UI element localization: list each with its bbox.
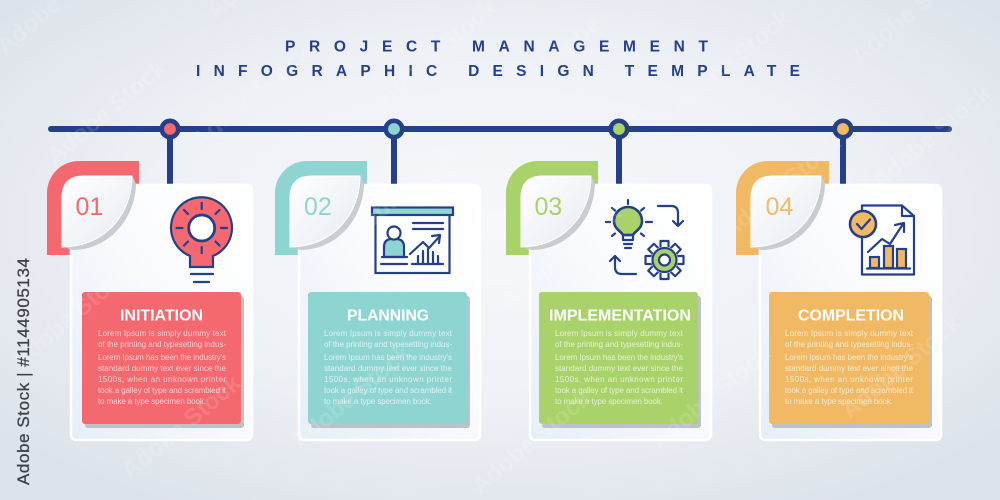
title	[196, 38, 800, 80]
text panel: Lorem Ipsum has been the industry's	[324, 353, 452, 362]
panel: initiation	[47, 161, 252, 440]
text panel: Lorem Ipsum is simply dummy text	[324, 329, 453, 338]
fold shadow	[64, 177, 136, 250]
number: 03	[534, 193, 562, 221]
card body	[71, 185, 252, 440]
panel: completion	[736, 161, 941, 440]
text panel: of the printing and typesetting indus-	[324, 340, 452, 349]
text panel: took a galley of type and scrambled it	[555, 386, 684, 395]
text panel	[769, 292, 932, 428]
number tab	[47, 161, 139, 255]
watermark pattern: Adobe Stock	[667, 4, 797, 120]
text panel	[539, 292, 701, 428]
fold leaf	[751, 176, 821, 247]
watermark pattern: Adobe Stock	[332, 139, 462, 255]
text panel: standard dummy text ever since the	[785, 364, 914, 373]
card body	[299, 185, 480, 440]
number tab	[506, 161, 598, 255]
text panel: Lorem Ipsum is simply dummy text	[785, 329, 914, 338]
text panel: to make a type specimen book.	[98, 397, 206, 406]
watermark pattern: Adobe Stock	[467, 384, 597, 500]
watermark pattern: Adobe Stock	[117, 369, 247, 485]
text panel	[82, 292, 244, 428]
fold shadow	[292, 177, 364, 250]
number: 01	[76, 193, 103, 221]
text panel: standard dummy text ever since the	[555, 364, 684, 373]
text panel: to make a type specimen book.	[555, 397, 663, 406]
text panel: IMPLEMENTATION	[549, 308, 691, 324]
watermark pattern: Adobe Stock	[497, 199, 627, 315]
icon: idea and gear cycle	[606, 200, 684, 279]
icon: report with check	[850, 206, 914, 274]
watermark pattern: Adobe Stock	[42, 54, 172, 170]
text panel: COMPLETION	[798, 308, 904, 324]
watermark pattern: Adobe Stock	[837, 309, 967, 425]
text panel: Lorem Ipsum has been the industry's	[785, 353, 913, 362]
panel: implementation	[506, 161, 711, 440]
panel: planning	[275, 161, 480, 440]
text panel: took a galley of type and scrambled it	[98, 386, 227, 395]
text panel: of the printing and typesetting indus-	[785, 340, 913, 349]
fold shadow	[753, 177, 825, 250]
text panel: Lorem Ipsum has been the industry's	[98, 353, 226, 362]
fold shadow	[523, 177, 595, 250]
text panel: to make a type specimen book.	[324, 397, 432, 406]
watermark pattern: Adobe Stock	[7, 259, 137, 375]
number: 02	[304, 193, 332, 221]
text panel: took a galley of type and scrambled it	[324, 386, 453, 395]
fold leaf	[290, 176, 360, 247]
watermark pattern: Adobe Stock	[867, 79, 997, 195]
watermark pattern: Adobe Stock	[647, 339, 777, 455]
number tab	[275, 161, 367, 255]
card body	[530, 185, 711, 440]
text panel: of the printing and typesetting indus-	[555, 340, 683, 349]
stock id label: Adobe Stock | #1144905134	[14, 258, 33, 485]
watermark pattern: Adobe Stock	[287, 339, 417, 455]
text panel: 1500s, when an unknown printer	[555, 375, 683, 384]
text panel: to make a type specimen book.	[785, 397, 893, 406]
text panel: PLANNING	[347, 308, 429, 324]
icon: light bulb	[171, 197, 232, 282]
card body	[760, 185, 941, 440]
title: INFOGRAPHIC DESIGN TEMPLATE	[196, 63, 800, 80]
text panel: standard dummy text ever since the	[324, 364, 453, 373]
timeline with nodes	[48, 121, 952, 185]
text panel: INITIATION	[120, 308, 203, 324]
number tab	[736, 161, 829, 255]
text panel: 1500s, when an unknown printer	[324, 375, 452, 384]
icon: presentation board	[372, 208, 453, 273]
watermark pattern: Adobe Stock	[717, 129, 847, 245]
text panel: Lorem Ipsum is simply dummy text	[98, 329, 227, 338]
text panel: Lorem Ipsum has been the industry's	[555, 353, 683, 362]
text panel: took a galley of type and scrambled it	[785, 386, 914, 395]
watermark pattern: Adobe	[532, 11, 606, 80]
text panel: 1500s, when an unknown printer	[98, 375, 226, 384]
watermark pattern: Adobe Stock	[187, 39, 317, 155]
text panel: Lorem Ipsum is simply dummy text	[555, 329, 684, 338]
text panel	[308, 292, 470, 428]
title: PROJECT MANAGEMENT	[285, 38, 709, 56]
text panel: 1500s, when an unknown printer	[785, 375, 913, 384]
fold leaf	[62, 176, 132, 247]
number: 04	[766, 193, 793, 221]
text panel: standard dummy text ever since the	[98, 364, 227, 373]
text panel: of the printing and typesetting indus-	[98, 340, 226, 349]
fold leaf	[521, 176, 591, 247]
